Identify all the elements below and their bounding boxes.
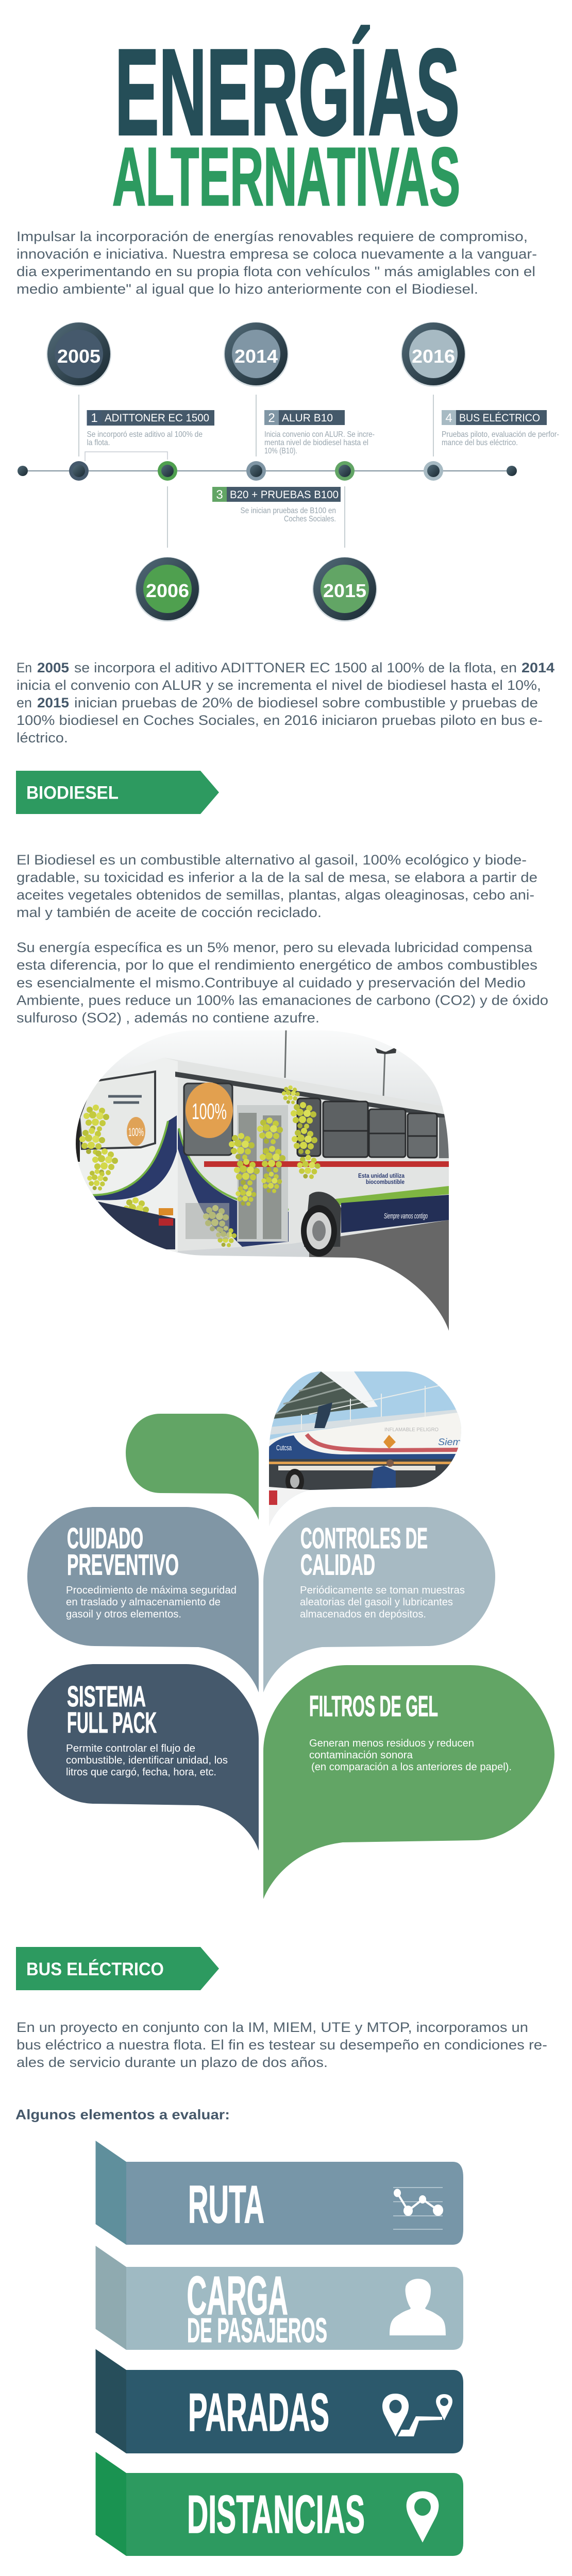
icon: line chart bbox=[393, 2188, 443, 2229]
label 3: B20 + PRUEBAS B100 bbox=[230, 489, 339, 501]
icon: person bbox=[390, 2279, 446, 2335]
bubble: sistema full pack: litros que cargó, fecha, hora, etc. bbox=[66, 1767, 216, 1778]
biodiesel text bbox=[16, 852, 548, 1025]
bubble: controles de calidad: CONTROLES DE bbox=[300, 1522, 428, 1555]
biodiesel text: Ambiente, pues reduce un 100% las emanaciones de carbono (CO2) y de óxido bbox=[16, 992, 548, 1008]
year 2005 bbox=[46, 322, 111, 387]
photo: biodiesel bus: 100% bbox=[128, 1126, 144, 1139]
bubble: controles de calidad bbox=[263, 1507, 495, 1692]
bubble: controles de calidad: Periódicamente se toman muestras bbox=[300, 1585, 465, 1596]
photo: biodiesel bus: Esta unidad utiliza bbox=[358, 1172, 405, 1179]
ribbon: carga de pasajeros: DE PASAJEROS bbox=[187, 2311, 327, 2350]
bubble: cuidado preventivo bbox=[27, 1507, 259, 1692]
label 3 bbox=[212, 487, 341, 523]
bubble: filtros de gel: FILTROS DE GEL bbox=[309, 1690, 438, 1723]
summary text: 2014 bbox=[521, 660, 554, 675]
summary text: 100% biodiesel en Coches Sociales, en 2016 iniciaron pruebas piloto en bus e- bbox=[16, 713, 543, 728]
photo: biodiesel bus: biocombustible bbox=[366, 1178, 405, 1185]
biodiesel text: es esencialmente el mismo.Contribuye al cuidado y preservación del Medio bbox=[16, 975, 526, 990]
bus electrico text: bus eléctrico a nuestra flota. El fin es testear su desempeño en condiciones re- bbox=[16, 2037, 547, 2053]
biodiesel text: esta diferencia, por lo que el rendimiento energético de ambos combustibles bbox=[16, 957, 537, 973]
timeline axis bbox=[23, 470, 512, 471]
bubble: cuidado preventivo: en traslado y almacenamiento de bbox=[66, 1597, 221, 1608]
bubble: sistema full pack: Permite controlar el flujo de bbox=[66, 1743, 195, 1754]
year 2006 bbox=[135, 557, 200, 622]
year 2014 bbox=[224, 322, 289, 387]
ribbon: carga de pasajeros bbox=[96, 2246, 463, 2350]
section tag: biodiesel bbox=[16, 771, 219, 814]
section tag: biodiesel: BIODIESEL bbox=[26, 783, 119, 803]
benefit bubbles bbox=[27, 1368, 554, 1899]
bubble: controles de calidad: CALIDAD bbox=[300, 1549, 375, 1582]
biodiesel text: mal y también de aceite de cocción reciclado. bbox=[16, 905, 322, 920]
photo: fuel tanker bbox=[265, 1368, 464, 1528]
intro text: dia experimentando en su propia flota con vehículos " más amiglables con el bbox=[16, 264, 535, 279]
year 2016: 2016 bbox=[412, 346, 455, 367]
bubble: cuidado preventivo: gasoil y otros elementos. bbox=[66, 1608, 181, 1620]
label 2: ALUR B10 bbox=[282, 412, 333, 424]
intro text: medio ambiente" al igual que lo hizo anteriormente con el Biodiesel. bbox=[16, 281, 478, 297]
label 2 bbox=[264, 410, 375, 455]
intro text bbox=[16, 229, 537, 297]
ribbon: paradas: PARADAS bbox=[188, 2383, 329, 2443]
bubble: controles de calidad: almacenados en depósitos. bbox=[300, 1608, 426, 1620]
bus electrico text bbox=[16, 2020, 547, 2070]
icon: route pins bbox=[382, 2394, 452, 2436]
label 3: Coches Sociales. bbox=[284, 515, 336, 523]
bubble: cuidado preventivo: Procedimiento de máxima seguridad bbox=[66, 1585, 237, 1596]
label 1: la flota. bbox=[87, 438, 110, 447]
subheading: Algunos elementos a evaluar: bbox=[15, 2107, 230, 2123]
timeline connectors bbox=[79, 395, 433, 548]
section tag: bus electrico: BUS ELÉCTRICO bbox=[26, 1959, 164, 1979]
biodiesel text: gradable, su toxicidad es inferior a la de la sal de mesa, se elabora a partir de bbox=[16, 870, 537, 885]
bubble: cuidado preventivo: PREVENTIVO bbox=[67, 1549, 179, 1582]
bus electrico text: En un proyecto en conjunto con la IM, MIEM, UTE y MTOP, incorporamos un bbox=[16, 2020, 528, 2035]
year 2014: 2014 bbox=[234, 346, 278, 367]
ribbon: distancias bbox=[96, 2452, 463, 2556]
ribbon: carga de pasajeros: CARGA bbox=[187, 2265, 288, 2326]
bubble: filtros de gel: (en comparación a los anteriores de papel). bbox=[311, 1761, 512, 1773]
label 4: 4 bbox=[445, 411, 452, 425]
label 2: Inicia convenio con ALUR. Se incre- bbox=[264, 430, 375, 439]
bubble: filtros de gel: contaminación sonora bbox=[309, 1750, 413, 1761]
photo: fuel tanker: Cutcsa bbox=[276, 1444, 292, 1452]
timeline nodes bbox=[18, 461, 517, 481]
label 1 bbox=[87, 410, 214, 447]
section tag: bus electrico bbox=[16, 1947, 219, 1990]
bubble: cuidado preventivo: CUIDADO bbox=[67, 1522, 143, 1555]
label 3: 3 bbox=[216, 488, 223, 502]
summary text: en bbox=[16, 695, 32, 710]
year 2006: 2006 bbox=[146, 580, 189, 601]
title bbox=[112, 24, 460, 223]
bus electrico text: ales de servicio durante un plazo de dos años. bbox=[16, 2055, 328, 2070]
label 2: 10% (B10). bbox=[264, 447, 297, 455]
bubble: sistema full pack: combustible, identificar unidad, los bbox=[66, 1755, 228, 1766]
label 1: 1 bbox=[91, 411, 98, 425]
summary text: se incorpora el aditivo ADITTONER EC 1500 al 100% de la flota, en bbox=[74, 660, 517, 675]
ribbon: ruta: RUTA bbox=[188, 2175, 264, 2234]
summary text: léctrico. bbox=[16, 730, 68, 745]
bubble: green empty bbox=[126, 1414, 259, 1520]
summary text: En bbox=[16, 660, 32, 675]
ribbon: paradas bbox=[96, 2349, 463, 2453]
biodiesel text: Su energía específica es un 5% menor, pero su elevada lubricidad compensa bbox=[16, 940, 533, 955]
year 2016 bbox=[401, 322, 466, 387]
label 1: Se incorporó este aditivo al 100% de bbox=[87, 430, 203, 439]
bubble: sistema full pack: SISTEMA bbox=[67, 1680, 146, 1713]
photo: biodiesel bus bbox=[72, 1028, 453, 1334]
icon: map pin bbox=[407, 2492, 439, 2543]
summary text: inician pruebas de 20% de biodiesel sobre combustible y pruebas de bbox=[74, 695, 538, 710]
summary text: 2015 bbox=[37, 695, 69, 710]
bubble: filtros de gel bbox=[263, 1665, 554, 1899]
photo: biodiesel bus: Siempre vamos contigo bbox=[384, 1212, 428, 1221]
label 1: ADITTONER EC 1500 bbox=[105, 412, 209, 424]
timeline bbox=[18, 322, 559, 622]
bubble: controles de calidad: aleatorias del gasoil y lubricantes bbox=[300, 1597, 453, 1608]
bubble: sistema full pack bbox=[27, 1664, 259, 1851]
ribbon: ruta bbox=[96, 2141, 463, 2245]
bubble: sistema full pack: FULL PACK bbox=[67, 1706, 157, 1739]
label 2: menta nivel de biodiesel hasta el bbox=[264, 438, 368, 447]
biodiesel text: sulfuroso (SO2) , además no contiene azufre. bbox=[16, 1010, 319, 1025]
intro text: innovación e iniciativa. Nuestra empresa se coloca nuevamente a la vanguar- bbox=[16, 246, 537, 262]
intro text: Impulsar la incorporación de energías renovables requiere de compromiso, bbox=[16, 229, 528, 244]
photo: biodiesel bus: 100% bbox=[192, 1099, 227, 1124]
biodiesel text: aceites vegetales obtenidos de semillas, plantas, algas oleaginosas, cebo ani- bbox=[16, 887, 534, 903]
bubble: filtros de gel: Generan menos residuos y reducen bbox=[309, 1738, 474, 1749]
label 4: mance del bus eléctrico. bbox=[442, 438, 518, 447]
summary text bbox=[16, 660, 554, 745]
year 2015 bbox=[312, 557, 377, 622]
year 2005: 2005 bbox=[57, 346, 100, 367]
photo: fuel tanker: INFLAMABLE PELIGRO bbox=[384, 1427, 439, 1433]
summary text: 2005 bbox=[37, 660, 69, 675]
label 2: 2 bbox=[268, 411, 275, 425]
label 4 bbox=[442, 410, 559, 447]
label 3: Se inician pruebas de B100 en bbox=[240, 506, 336, 515]
photo: fuel tanker: Siem bbox=[438, 1437, 461, 1447]
ribbon: distancias: DISTANCIAS bbox=[187, 2485, 365, 2545]
year 2015: 2015 bbox=[323, 580, 366, 601]
summary text: inicia el convenio con ALUR y se incrementa el nivel de biodiesel hasta el 10%, bbox=[16, 677, 541, 693]
label 4: BUS ELÉCTRICO bbox=[459, 412, 540, 424]
biodiesel text: El Biodiesel es un combustible alternativo al gasoil, 100% ecológico y biode- bbox=[16, 852, 527, 868]
